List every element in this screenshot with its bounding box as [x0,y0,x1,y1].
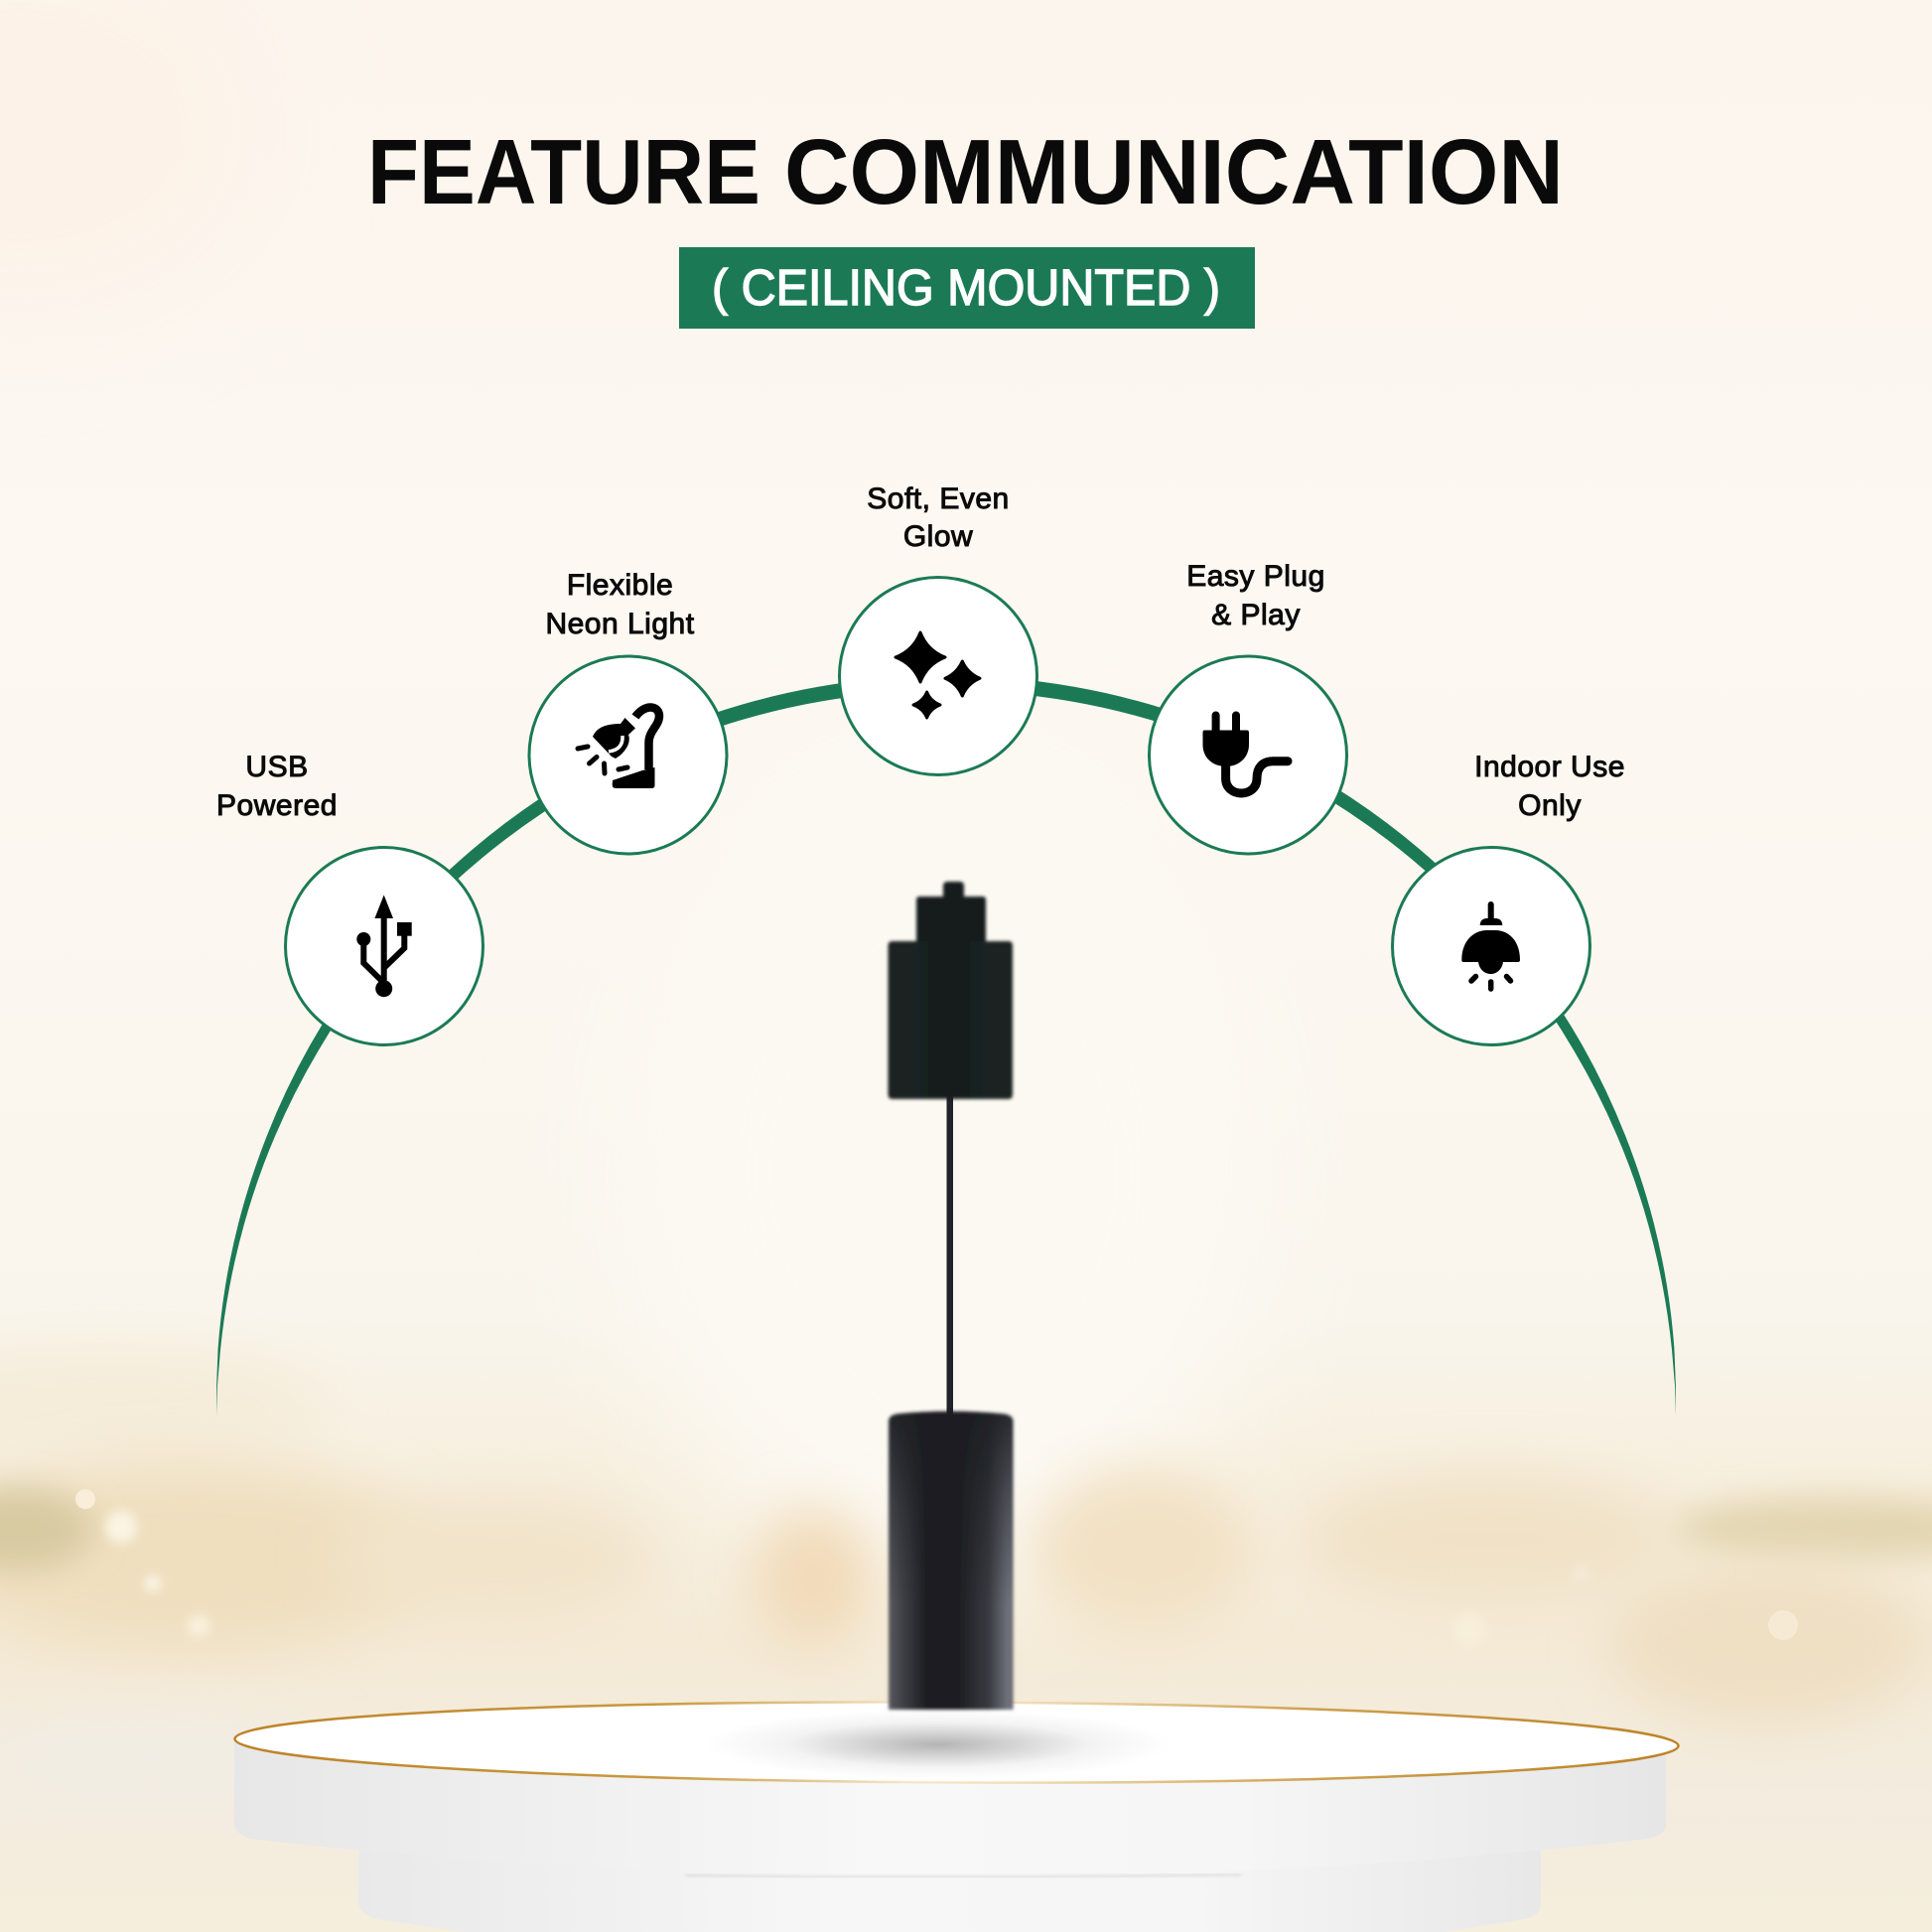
podium [234,1699,1679,1932]
podium lower tier [358,1847,1541,1932]
label: Flexible Neon Light: Flexible [567,569,673,602]
label: USB Powered: USB [245,751,309,783]
label: Indoor Use Only: Indoor Use [1474,751,1625,783]
lamp cylinder [889,1412,1013,1710]
ceiling canopy [888,882,1013,1099]
title: COMMUNICATION [784,120,1564,223]
circle: plug [1150,656,1346,854]
icon: USB symbol [356,896,412,997]
circle: flexible light [529,656,727,854]
label: Soft, Even Glow: Soft, Even [867,483,1010,515]
circle: USB [286,848,483,1044]
label: Soft, Even Glow: Glow [903,520,973,553]
circle: glow [840,578,1036,774]
label: Easy Plug & Play: Easy Plug [1186,560,1325,593]
pendant cord [947,1092,953,1415]
icon: ceiling lamp [1461,904,1520,989]
feature: Soft, Even Glow [840,483,1036,774]
subtitle badge [679,247,1255,329]
podium top surface [234,1699,1679,1786]
title [367,120,1564,223]
podium upper tier [234,1739,1666,1876]
feature: Indoor Use Only [1392,751,1625,1044]
podium shadow [705,1710,1172,1779]
icon: sparkles [896,632,980,718]
feature: Easy Plug & Play [1150,560,1346,854]
feature: USB Powered [216,751,483,1044]
label: Indoor Use Only: Only [1518,789,1582,822]
product: pendant lamp [888,882,1013,1710]
icon: plug and cord [1203,715,1288,793]
icon: desk lamp [578,707,659,788]
subtitle badge: ( CEILING MOUNTED ) [712,259,1220,316]
label: Flexible Neon Light: Neon Light [545,608,695,640]
arc connecting the features [216,675,1676,1416]
feature: Flexible Neon Light [529,569,727,854]
circle: indoor [1392,848,1590,1044]
title: FEATURE [367,120,760,223]
label: USB Powered: Powered [216,789,338,822]
label: Easy Plug & Play: & Play [1211,599,1301,631]
